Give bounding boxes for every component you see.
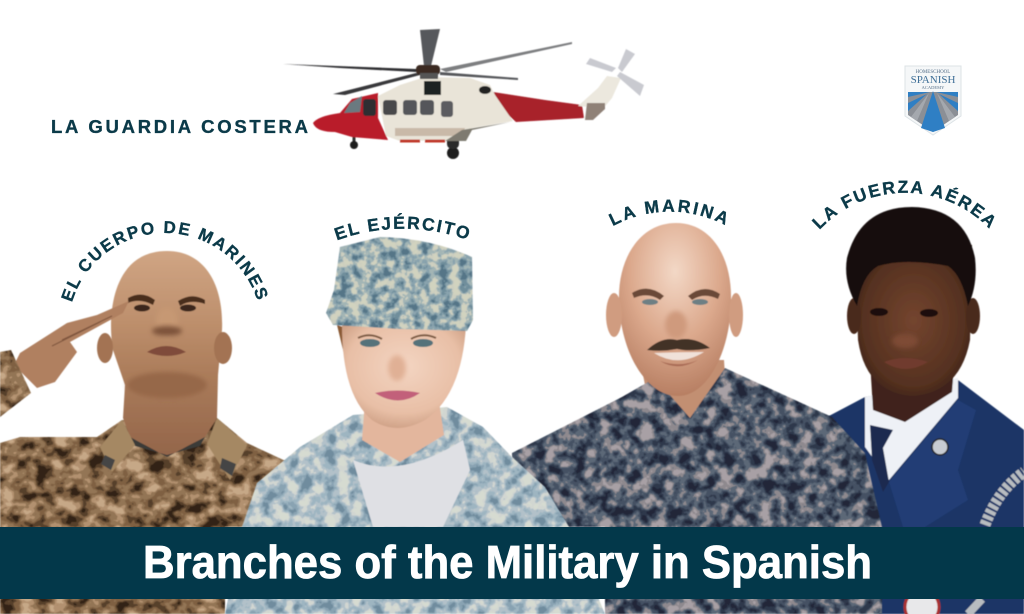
person: marine saluting bbox=[0, 251, 290, 614]
neckline bbox=[130, 437, 205, 457]
uniform: desert camouflage bbox=[0, 418, 290, 614]
nose bbox=[665, 311, 687, 339]
nose bbox=[388, 355, 406, 381]
lapel bbox=[889, 400, 976, 527]
head bbox=[855, 245, 972, 396]
heading: La Guardia Costera: LA GUARDIA COSTERA bbox=[51, 116, 308, 137]
nose and mouth bbox=[892, 334, 918, 348]
person: navy sailor bbox=[512, 223, 882, 614]
eyes bbox=[360, 339, 380, 347]
icon: Homeschool Spanish Academy logo shield: HOMESCHOOL bbox=[916, 70, 950, 75]
jacket bbox=[827, 380, 1024, 614]
heading: La Fuerza Aerea: LA FUERZA AÉREA bbox=[812, 180, 994, 230]
heading: El Cuerpo de Marines: EL CUERPO DE MARINES bbox=[61, 221, 268, 302]
heading: La Marina: LA MARINA bbox=[608, 200, 726, 226]
aiguillette rope bbox=[985, 472, 1024, 525]
jacket: digital camouflage bbox=[225, 407, 605, 614]
eyes bbox=[870, 308, 888, 316]
neck bbox=[362, 395, 444, 462]
badge bbox=[932, 439, 948, 455]
collar bbox=[100, 418, 247, 480]
icon: Homeschool Spanish Academy logo shield: ACADEMY bbox=[922, 85, 945, 90]
sleeve bbox=[0, 350, 31, 417]
face features bbox=[128, 294, 205, 306]
chest patch bbox=[905, 590, 939, 614]
face bbox=[342, 325, 466, 428]
heading: El Ejercito: EL EJÉRCITO bbox=[334, 213, 470, 240]
brows and eyes bbox=[632, 289, 720, 300]
icon: coast guard helicopter bbox=[283, 29, 644, 159]
title banner bbox=[0, 527, 1024, 599]
title: Branches of the Military in Spanish bbox=[143, 536, 872, 588]
hand bbox=[14, 301, 129, 388]
neck bbox=[870, 355, 955, 422]
hair bbox=[846, 207, 976, 306]
lips bbox=[375, 390, 420, 400]
person: air force officer bbox=[827, 207, 1024, 614]
neck bbox=[640, 360, 726, 432]
cap bbox=[326, 237, 473, 331]
smile bbox=[654, 352, 704, 360]
moustache bbox=[647, 339, 710, 351]
person: army soldier bbox=[225, 237, 605, 614]
icon: Homeschool Spanish Academy logo shield: SPANISH bbox=[911, 74, 955, 86]
t-shirt bbox=[353, 440, 470, 527]
head and neck bbox=[111, 251, 222, 457]
tie bbox=[870, 425, 893, 492]
shirt bbox=[865, 378, 958, 480]
under-chin shadow bbox=[127, 372, 207, 398]
icon: Homeschool Spanish Academy logo shield bbox=[905, 66, 961, 135]
hair bbox=[337, 325, 466, 358]
head bbox=[619, 223, 731, 396]
ears bbox=[97, 333, 113, 363]
uniform: navy camouflage bbox=[512, 368, 882, 614]
